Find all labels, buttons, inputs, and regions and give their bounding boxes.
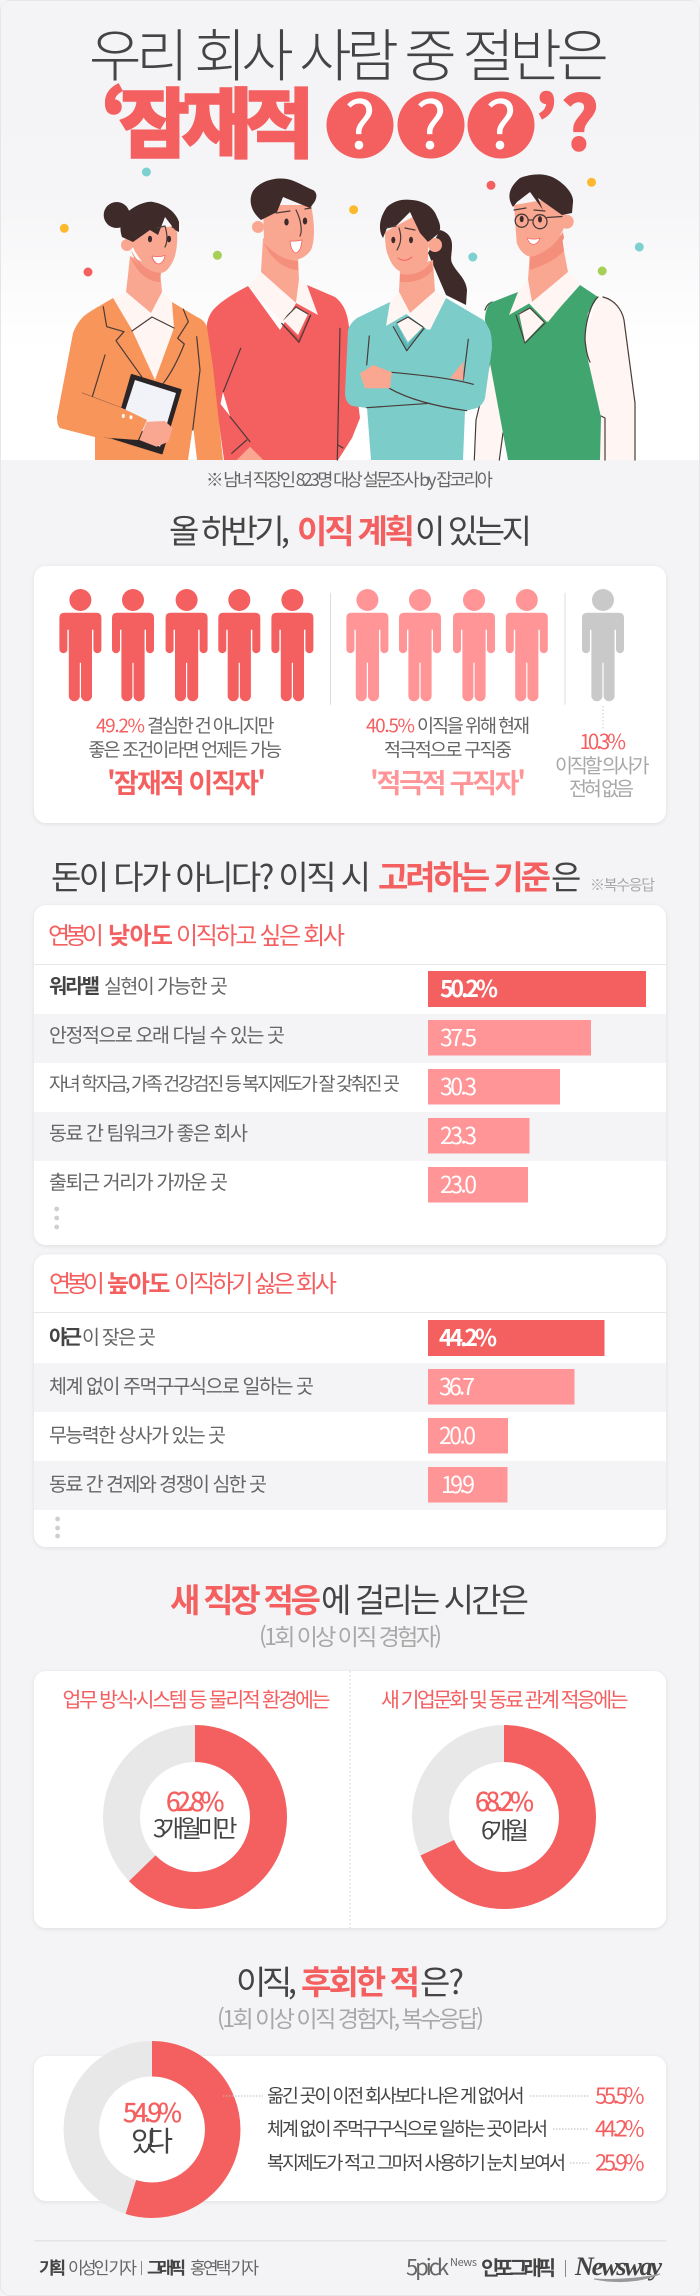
section heading: adaptation time [170,1574,529,1652]
row: night work: 야근 [49,1321,82,1350]
reason 1: 55.5% [595,2078,644,2110]
icon: question circle 2: ? [415,73,447,169]
text: no intention: 이직할 의사가 [555,750,650,778]
text: potential movers: 좋은 조건이라면 언제든 가능 [88,736,282,762]
section heading: job change plan: 이직 계획 [297,505,415,553]
panel heading [49,1264,337,1299]
row: competition [49,1466,508,1502]
illustration: four coworkers [57,168,644,460]
section heading: criteria: 은 [551,851,581,899]
section heading: adaptation time: (1회 이상 이직 경험자) [259,1618,442,1652]
text: active seekers: 40.5% [366,712,415,738]
footer logo: 인포그래픽 [481,2252,556,2281]
title line 1: 우리 회사 사람 중 절반은 [89,11,609,93]
survey note: ※ 남녀 직장인 823명 대상 설문조사 by 잡코리아 [206,467,493,492]
row: work-life balance: 워라밸 [49,970,100,999]
icon: question circle 2 [398,73,464,169]
row: teamwork [49,1117,530,1154]
section heading: regret: 은? [420,1956,464,2004]
row: long-term stability: 37.5 [440,1019,477,1053]
text: potential movers: 결심한 건 아니지만 [147,712,274,738]
section heading: adaptation time: 에 걸리는 시간은 [321,1574,529,1622]
reason 1: 옮긴 곳이 이전 회사보다 나은 게 없어서 [267,2082,524,2108]
pictogram: four active seekers [346,589,548,701]
row: long-term stability [49,1019,591,1056]
icon: question circle 3: ? [485,73,517,169]
icon: question circle 1 [326,73,394,169]
text: no intention [555,725,650,802]
hero illustration background [1,1,699,460]
reason 3: 25.9% [595,2146,644,2178]
reason 2: 44.2% [595,2112,644,2144]
footer credits: 기획 [39,2254,66,2279]
donut: physical environment [62,1683,330,1890]
row: incompetent boss: 20.0 [439,1417,476,1451]
donut: physical environment: 업무 방식·시스템 등 물리적 환경에는 [62,1683,330,1713]
donut: regret: 54.9% [123,2093,182,2130]
donut: physical environment: 62.8% [166,1782,224,1819]
row: teamwork: 23.3 [440,1117,477,1151]
pictogram: five potential movers [59,589,313,701]
text: potential movers [88,712,282,801]
reason 2 [267,2112,644,2144]
section heading: job change plan [169,505,532,553]
panel heading: 이직하기 싫은 회사 [174,1264,337,1299]
row: work-life balance [49,970,646,1007]
pictogram: one with no intention [582,589,624,701]
donut: regret: 있다 [131,2120,173,2160]
row: incompetent boss: 무능력한 상사가 있는 곳 [49,1419,226,1448]
row: night work: 44.2% [439,1319,497,1353]
donut: culture and colleagues: 68.2% [475,1782,534,1819]
row: work-life balance: 실현이 가능한 곳 [104,970,228,999]
footer logo: 5pick [406,2250,449,2282]
donut: culture and colleagues: 6개월 [481,1811,529,1846]
row: night work [49,1319,604,1356]
row: competition: 동료 간 견제와 경쟁이 심한 곳 [49,1468,267,1497]
panel: adaptation donuts [34,1671,666,1928]
more indicator [54,1207,59,1229]
reason 3 [267,2146,644,2178]
title: closing mark: ’? [534,65,599,172]
donut: culture and colleagues [381,1683,628,1890]
row: benefits: 30.3 [440,1068,477,1102]
footer credits: 홍연택 기자 [190,2254,259,2279]
row: commute: 23.0 [440,1166,477,1200]
section heading: regret: (1회 이상 이직 경험자, 복수응답) [217,2000,484,2034]
row: unsystematic [49,1368,574,1404]
text: potential movers: '잠재적 이직자' [107,762,266,801]
text: active seekers: 이직을 위해 현재 [417,712,530,738]
footer logo: News [450,2254,477,2270]
row: unsystematic: 체계 없이 주먹구구식으로 일하는 곳 [49,1370,314,1399]
panel heading: 낮아도 [108,916,173,951]
panel heading [48,916,345,951]
section heading: regret: 이직, [236,1956,297,2004]
reason 3: 복지제도가 적고 그마저 사용하기 눈치 보여서 [267,2150,566,2176]
footer credits [39,2254,259,2279]
decorative confetti dots [60,168,644,276]
row: competition: 19.9 [441,1466,475,1500]
row: incompetent boss [49,1417,508,1454]
figure: woman in orange blazer with tablet [57,202,223,460]
row: commute: 출퇴근 거리가 가까운 곳 [49,1166,228,1195]
panel heading: 높아도 [107,1264,170,1299]
title: potential: ‘잠재적 [102,64,314,173]
row: night work: 이 잦은 곳 [82,1321,156,1350]
section heading: job change plan: 올 하반기, [169,505,290,553]
panel heading: 연봉이 [48,916,104,951]
section heading: regret: 후회한 적 [301,1956,420,2004]
footer credits: 그래픽 [147,2254,186,2279]
donut: physical environment: 3개월미만 [153,1809,238,1844]
figure: man in green vest [474,174,635,460]
figure: woman in teal sweater [345,200,492,460]
panel: companies to avoid [34,1254,666,1547]
row: commute [49,1166,528,1202]
row: long-term stability: 안정적으로 오래 다닐 수 있는 곳 [49,1019,285,1048]
footer logo [406,2250,662,2282]
section heading: criteria [51,851,655,899]
section heading: adaptation time: 새 직장 적응 [170,1574,321,1622]
panel: job change plan [34,566,666,823]
icon: question circle 3 [468,73,534,169]
text: active seekers: 적극적으로 구직중 [384,736,512,762]
more indicator [55,1517,60,1538]
text: no intention: 전혀 없음 [569,772,634,802]
figure: man in red sweater [207,178,360,460]
row: benefits: 자녀 학자금, 가족 건강검진 등 복지제도가 잘 갖춰진 곳 [49,1070,400,1096]
footer credits: 이성인 기자 [68,2254,137,2279]
row: work-life balance: 50.2% [440,970,498,1004]
row: unsystematic: 36.7 [439,1368,475,1402]
donut: regret [81,2059,223,2200]
section heading: regret [217,1956,484,2034]
section heading: criteria: ※복수응답 [590,874,655,895]
panel heading: 연봉이 [49,1264,105,1299]
panel: regret reasons [34,2056,666,2201]
section heading: criteria: 고려하는 기준 [378,851,551,899]
text: no intention: 10.3% [580,725,626,755]
reason 2: 체계 없이 주먹구구식으로 일하는 곳이라서 [267,2116,548,2142]
panel heading: 이직하고 싶은 회사 [176,916,345,951]
text: active seekers: '적극적 구직자' [370,762,526,801]
row: benefits [49,1068,560,1104]
text: potential movers: 49.2% [96,712,145,738]
donut: culture and colleagues: 새 기업문화 및 동료 관계 적응에는 [381,1683,628,1713]
icon: question circle 1: ? [344,73,376,169]
section heading: job change plan: 이 있는지 [415,505,532,553]
section heading: criteria: 돈이 다가 아니다? 이직 시 [51,851,371,899]
title line 2 [102,64,599,173]
reason 1 [223,2078,644,2110]
row: teamwork: 동료 간 팀워크가 좋은 회사 [49,1117,248,1146]
footer logo: Newsway [574,2252,662,2281]
text: active seekers [366,712,530,801]
tablet [113,375,181,453]
panel: companies worth moving to [34,905,666,1245]
